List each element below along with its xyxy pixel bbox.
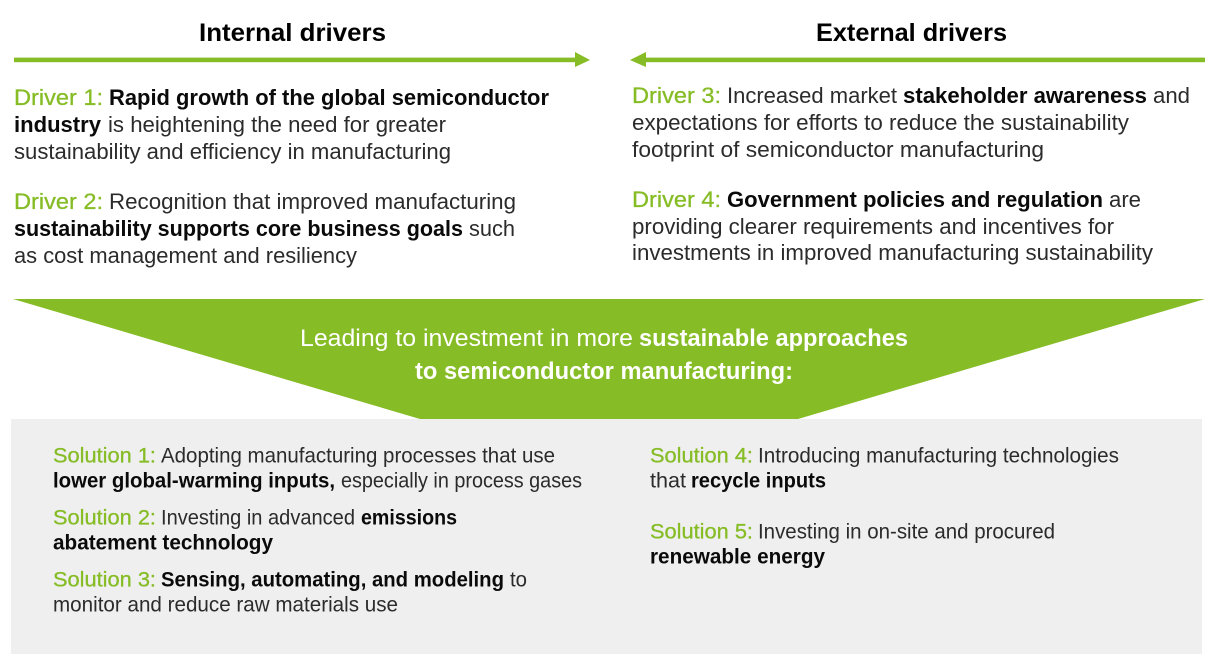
- arrow: internal drivers pointing right: [14, 52, 590, 67]
- text block: driver 1: sustainability and efficiency in manufacturing: [14, 139, 451, 164]
- text block: solution 2: [53, 506, 457, 554]
- text block: driver 2: such: [469, 216, 515, 241]
- heading: internal drivers: Internal drivers: [199, 19, 386, 47]
- text block: solution 5: renewable energy: [650, 544, 825, 568]
- text block: solution 3: Sensing, automating, and modeling: [161, 568, 504, 592]
- text block: driver 2: Recognition that improved manufacturing: [109, 189, 516, 214]
- text block: solution 2: Investing in advanced: [161, 506, 355, 530]
- text block: driver 4: investments in improved manufacturing sustainability: [632, 240, 1153, 265]
- text block: driver 4: are: [1109, 187, 1141, 212]
- text block: solution 5: Investing in on-site and procured: [758, 520, 1055, 544]
- text block: solution 3: to: [510, 568, 527, 592]
- text block: driver 3: Increased market: [727, 83, 897, 108]
- text block: solution 4: recycle inputs: [691, 468, 826, 492]
- text block: driver 1: is heightening the need for greater: [108, 112, 446, 137]
- text block: driver 4: Driver 4:: [632, 187, 721, 212]
- text block: solution 4: Solution 4:: [650, 444, 753, 468]
- text block: driver 1: Rapid growth of the global semiconductor: [109, 85, 549, 110]
- text block: driver 3: stakeholder awareness: [903, 83, 1147, 108]
- text block: driver 1: Driver 1:: [14, 85, 103, 110]
- text block: driver 3: Driver 3:: [632, 83, 721, 108]
- text block: driver 1: [14, 85, 549, 164]
- banner text: leading to investment: [300, 325, 908, 385]
- text block: solution 2: Solution 2:: [53, 506, 156, 530]
- text block: driver 4: providing clearer requirements and incentives for: [632, 214, 1114, 239]
- text block: driver 1: industry: [14, 112, 102, 137]
- text block: driver 3: [632, 83, 1190, 162]
- text block: solution 2: abatement technology: [53, 530, 273, 554]
- text block: driver 2: sustainability supports core business goals: [14, 216, 463, 241]
- heading: external drivers: External drivers: [816, 19, 1007, 47]
- banner: green funnel shape: [13, 299, 1205, 419]
- banner text: leading to investment: sustainable approaches: [639, 325, 908, 352]
- text block: solution 2: emissions: [361, 506, 457, 530]
- text block: solution 1: lower global-warming inputs,: [53, 468, 335, 492]
- text block: solution 1: Adopting manufacturing processes that use: [161, 444, 555, 468]
- text block: driver 3: and: [1153, 83, 1190, 108]
- text block: solution 4: [650, 444, 1119, 492]
- text block: solution 4: Introducing manufacturing technologies: [758, 444, 1119, 468]
- text block: driver 4: [632, 187, 1153, 265]
- text block: driver 4: Government policies and regulation: [727, 187, 1103, 212]
- banner text: leading to investment: Leading to investment in more: [300, 325, 633, 352]
- text block: solution 3: monitor and reduce raw materials use: [53, 592, 398, 616]
- text block: solution 4: that: [650, 468, 686, 492]
- text block: solution 3: Solution 3:: [53, 568, 156, 592]
- arrow: external drivers pointing left: [630, 52, 1205, 67]
- text block: driver 2: [14, 189, 516, 268]
- banner text: leading to investment: to semiconductor manufacturing:: [415, 358, 793, 385]
- text block: solution 1: [53, 444, 582, 492]
- text block: driver 2: Driver 2:: [14, 189, 103, 214]
- panel: solutions background: [11, 419, 1202, 654]
- text block: solution 3: [53, 568, 527, 616]
- text block: driver 3: expectations for efforts to reduce the sustainability: [632, 110, 1129, 135]
- text block: solution 1: Solution 1:: [53, 444, 156, 468]
- text block: solution 5: [650, 520, 1055, 568]
- text block: solution 5: Solution 5:: [650, 520, 753, 544]
- text block: solution 1: especially in process gases: [341, 468, 582, 492]
- text block: driver 3: footprint of semiconductor manufacturing: [632, 137, 1044, 162]
- text block: driver 2: as cost management and resiliency: [14, 243, 357, 268]
